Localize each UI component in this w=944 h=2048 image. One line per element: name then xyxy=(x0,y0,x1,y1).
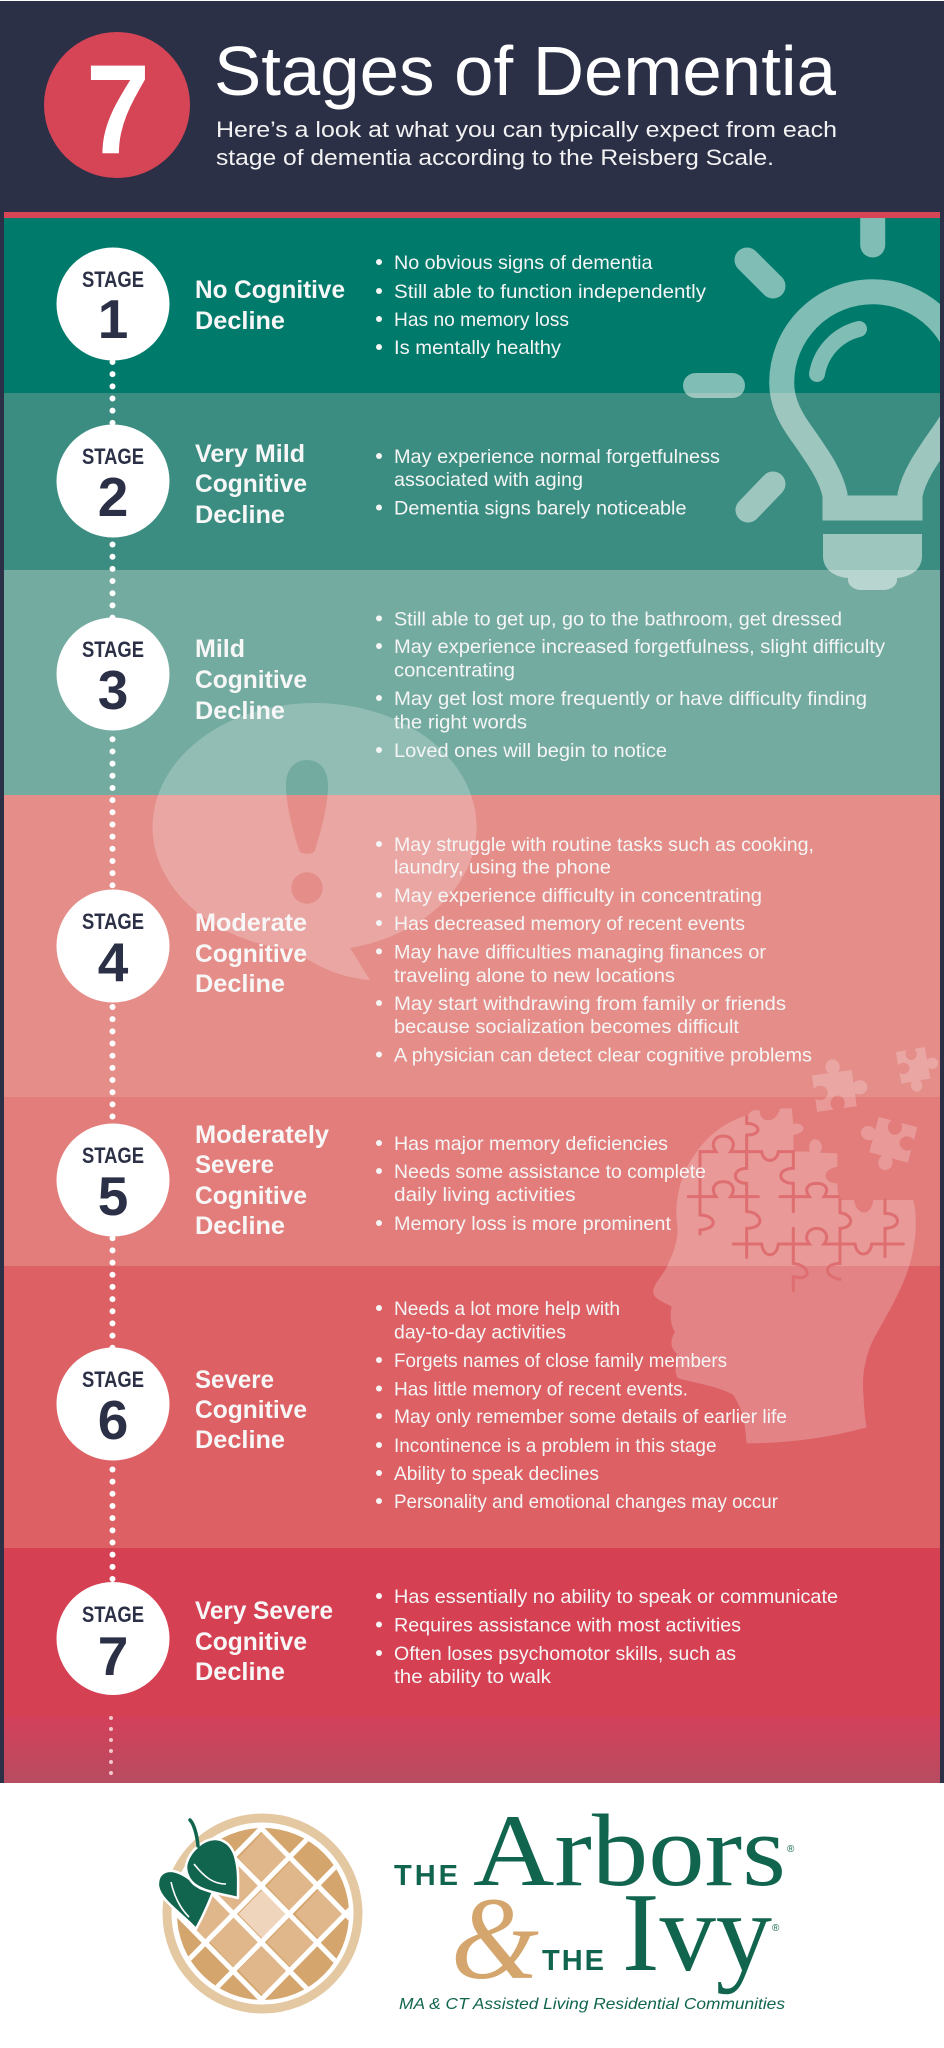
badge: stage 7: 7 xyxy=(98,1625,128,1687)
icon: head with puzzle pieces xyxy=(653,1045,943,1443)
bullet list: stage 3: concentrating xyxy=(394,659,515,681)
bullet list: stage 3: May get lost more frequently or have difficulty finding xyxy=(394,688,867,710)
subtitle: Here’s a look at what you can typically expect from each xyxy=(216,117,837,142)
badge: stage 1: 1 xyxy=(98,288,128,350)
subtitle xyxy=(216,117,837,170)
heading: stage 4 xyxy=(195,909,307,998)
loose puzzle piece 1 xyxy=(812,1059,868,1112)
heading: stage 3: Mild xyxy=(195,635,245,663)
heading: stage 3 xyxy=(195,635,307,725)
panel: stage 3 xyxy=(4,570,940,795)
heading: stage 5: Cognitive xyxy=(195,1182,307,1210)
title: Stages of Dementia xyxy=(214,32,836,110)
heading: stage 4: Cognitive xyxy=(195,940,307,968)
bullet list: stage 6: day-to-day activities xyxy=(394,1322,566,1344)
head silhouette xyxy=(653,1108,916,1443)
badge: stage 4: STAGE xyxy=(82,909,144,934)
badge: stage 2: STAGE xyxy=(82,444,144,469)
heading: stage 2: Cognitive xyxy=(195,470,307,498)
bullet list: stage 6: Forgets names of close family members xyxy=(394,1350,727,1372)
bullet list: stage 3: the right words xyxy=(394,712,527,734)
heading: stage 1: No Cognitive xyxy=(195,276,345,304)
badge: stage 3: STAGE xyxy=(82,637,144,662)
bullet list: stage 1 xyxy=(376,252,706,359)
bullet list: stage 5: Needs some assistance to complete xyxy=(394,1161,706,1183)
bullet list: stage 4: May experience difficulty in concentrating xyxy=(394,885,762,907)
bullet list: stage 2: associated with aging xyxy=(394,469,583,491)
bullet list: stage 1: Is mentally healthy xyxy=(394,337,561,359)
heading: stage 2: Very Mild xyxy=(195,440,305,468)
bullet list: stage 6: May only remember some details of earlier life xyxy=(394,1406,787,1428)
bullet list: stage 4: A physician can detect clear cognitive problems xyxy=(394,1044,812,1066)
bullet list: stage 6: Personality and emotional changes may occur xyxy=(394,1491,778,1513)
bullet list: stage 1: No obvious signs of dementia xyxy=(394,252,653,274)
bullet list: stage 3 xyxy=(376,608,885,762)
bullet list: stage 4: May start withdrawing from family or friends xyxy=(394,993,786,1015)
bullet list: stage 1: Still able to function independently xyxy=(394,281,706,303)
bullet list: stage 7: Often loses psychomotor skills, such as xyxy=(394,1643,736,1665)
dotted timeline connecting stages xyxy=(111,362,112,1782)
bullet list: stage 7: the ability to walk xyxy=(394,1666,551,1688)
bullet list: stage 4: because socialization becomes difficult xyxy=(394,1016,740,1038)
heading: stage 6: Severe xyxy=(195,1366,274,1394)
bullet list: stage 1: Has no memory loss xyxy=(394,309,569,331)
heading: stage 6: Cognitive xyxy=(195,1396,307,1424)
heading: stage 1 xyxy=(195,276,345,335)
badge: stage 4 xyxy=(56,890,170,1002)
bullet list: stage 4: laundry, using the phone xyxy=(394,856,611,878)
logo wordmark: ® xyxy=(787,1844,795,1855)
bullet list: stage 5: daily living activities xyxy=(394,1184,576,1206)
bullet list: stage 3: Loved ones will begin to notice xyxy=(394,740,667,762)
heading: stage 4: Decline xyxy=(195,970,285,998)
heading: stage 6: Decline xyxy=(195,1426,285,1454)
panel: stage 1 xyxy=(4,218,940,393)
bullet list: stage 5: Memory loss is more prominent xyxy=(394,1213,672,1235)
icon: light bulb xyxy=(696,210,944,590)
bullet list: stage 7 xyxy=(376,1586,838,1688)
badge: stage 2 xyxy=(56,424,170,538)
heading: stage 7: Very Severe xyxy=(195,1597,333,1625)
bullet list: stage 4: traveling alone to new locations xyxy=(394,965,675,987)
loose puzzle piece 2 xyxy=(861,1117,918,1170)
badge: stage 5: STAGE xyxy=(82,1143,144,1168)
badge: stage 6: 6 xyxy=(98,1389,128,1451)
logo wordmark: & xyxy=(451,1873,539,2004)
bullet list: stage 4: May struggle with routine tasks such as cooking, xyxy=(394,834,814,856)
header badge: number 7 xyxy=(44,32,190,180)
heading: stage 5: Moderately xyxy=(195,1121,329,1149)
bullet list: stage 7: Requires assistance with most activities xyxy=(394,1614,741,1636)
bullet list: stage 6: Needs a lot more help with xyxy=(394,1298,620,1320)
badge: stage 6 xyxy=(56,1348,170,1460)
badge: stage 1: STAGE xyxy=(82,267,144,292)
heading: stage 2: Decline xyxy=(195,501,285,529)
coloured stage bands xyxy=(4,218,940,1783)
subtitle: stage of dementia according to the Reisberg Scale. xyxy=(216,145,774,170)
bullet list: stage 2: May experience normal forgetfulness xyxy=(394,446,720,468)
heading: stage 7: Decline xyxy=(195,1658,285,1686)
heading: stage 5: Decline xyxy=(195,1212,285,1240)
bullet list: stage 2: Dementia signs barely noticeable xyxy=(394,498,686,520)
badge: stage 5: 5 xyxy=(98,1165,128,1227)
panel: stage 4 xyxy=(4,795,940,1097)
badge: stage 2: 2 xyxy=(98,466,128,528)
heading: stage 4: Moderate xyxy=(195,909,307,937)
puzzle seams xyxy=(688,1117,903,1291)
ivy leaves xyxy=(158,1839,238,1929)
heading: stage 5 xyxy=(195,1121,329,1240)
panel: stage 7 xyxy=(4,1548,940,1782)
panel: stage 2 xyxy=(4,393,940,570)
panel: stage 6 xyxy=(4,1266,940,1548)
bullet list: stage 2 xyxy=(376,446,720,520)
icon: speech bubble with exclamation mark xyxy=(153,703,477,980)
bullet list: stage 3: Still able to get up, go to the bathroom, get dressed xyxy=(394,608,842,630)
bullet list: stage 4 xyxy=(376,834,814,1066)
bullet list: stage 5 xyxy=(376,1133,706,1235)
bullet list: stage 6 xyxy=(376,1298,787,1513)
badge: stage 6: STAGE xyxy=(82,1367,144,1392)
heading: stage 2 xyxy=(195,440,307,529)
bullet list: stage 7: Has essentially no ability to speak or communicate xyxy=(394,1586,838,1608)
logo wordmark: Ivy xyxy=(622,1871,772,1995)
heading: stage 7: Cognitive xyxy=(195,1628,307,1656)
header badge: number 7: 7 xyxy=(86,38,150,180)
badge: stage 1 xyxy=(56,248,170,360)
bullet list: stage 6: Incontinence is a problem in this stage xyxy=(394,1435,716,1457)
header accent bar xyxy=(4,212,940,218)
badge: stage 7 xyxy=(56,1582,170,1695)
badge: stage 3 xyxy=(56,618,170,730)
logo wordmark: MA & CT Assisted Living Residential Communities xyxy=(399,1996,785,2013)
bullet list: stage 6: Has little memory of recent events. xyxy=(394,1378,688,1400)
bullet list: stage 6: Ability to speak declines xyxy=(394,1463,599,1485)
panel: stage 5 xyxy=(4,1097,940,1266)
logo emblem: lattice circle with ivy leaves xyxy=(158,1814,362,2014)
logo wordmark: THE xyxy=(394,1860,458,1892)
logo wordmark: Arbors xyxy=(473,1794,786,1908)
logo wordmark: ® xyxy=(772,1923,780,1934)
bullet list: stage 4: Has decreased memory of recent events xyxy=(394,913,745,935)
badge: stage 5 xyxy=(56,1124,170,1236)
badge: stage 3: 3 xyxy=(98,659,128,721)
heading: stage 1: Decline xyxy=(195,307,285,335)
badge: stage 7: STAGE xyxy=(82,1602,144,1627)
logo wordmark xyxy=(394,1794,795,2013)
bullet list: stage 5: Has major memory deficiencies xyxy=(394,1133,668,1155)
bullet list: stage 3: May experience increased forgetfulness, slight difficulty xyxy=(394,636,885,658)
loose puzzle piece 3 xyxy=(896,1047,938,1092)
badge: stage 4: 4 xyxy=(98,931,129,993)
logo wordmark: THE xyxy=(542,1945,604,1977)
heading: stage 3: Decline xyxy=(195,697,285,725)
bullet list: stage 4: May have difficulties managing finances or xyxy=(394,941,767,963)
heading: stage 7 xyxy=(195,1597,333,1686)
heading: stage 3: Cognitive xyxy=(195,666,307,694)
heading: stage 5: Severe xyxy=(195,1151,274,1179)
heading: stage 6 xyxy=(195,1366,307,1454)
